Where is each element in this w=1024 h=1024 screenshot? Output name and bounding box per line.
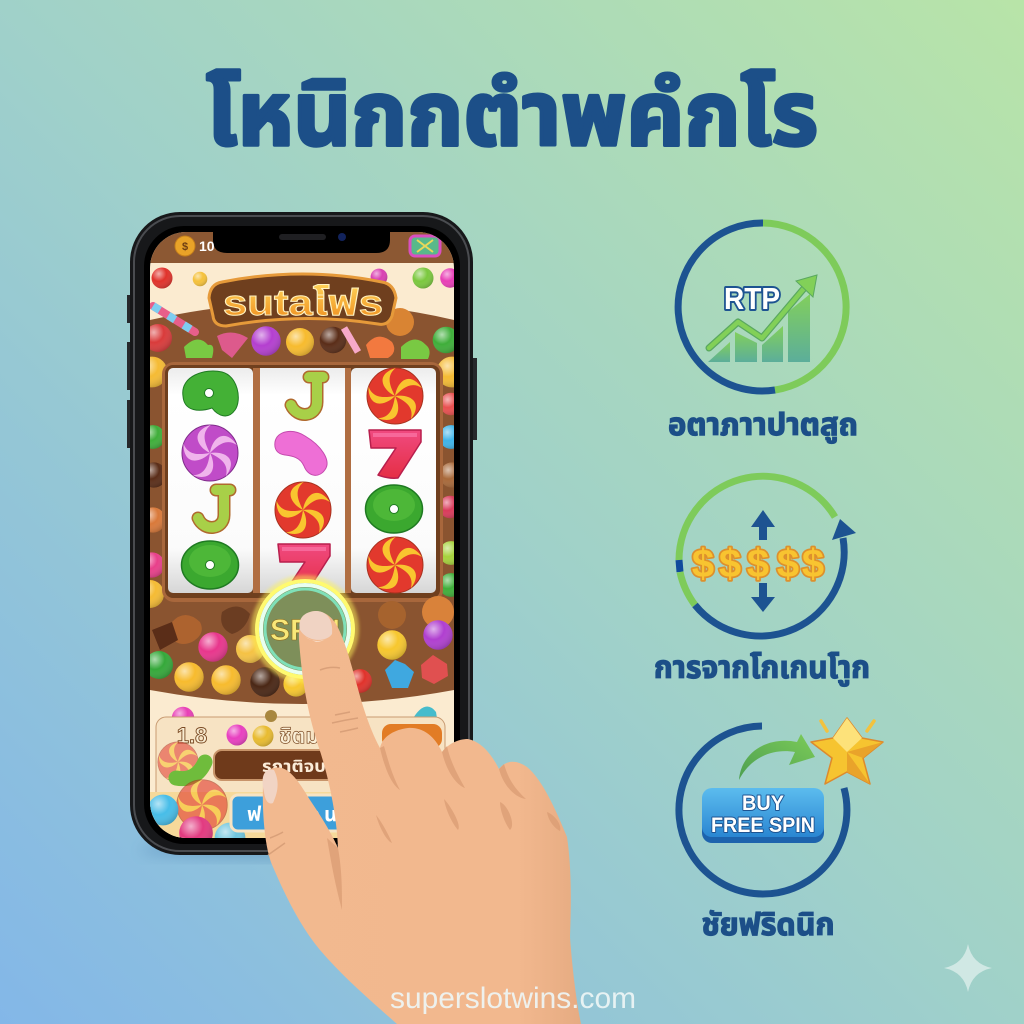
ring: free spin xyxy=(679,726,847,894)
index nail xyxy=(299,611,332,640)
notch and top bar items: $ xyxy=(182,241,188,253)
spin button xyxy=(251,575,359,683)
brown button xyxy=(213,749,328,781)
thumb nail xyxy=(263,770,278,803)
bottom game panel xyxy=(150,706,446,838)
star xyxy=(811,718,883,784)
stat: high RTP xyxy=(668,223,858,443)
rising bars xyxy=(708,294,810,362)
dollar signs: $ xyxy=(802,542,824,586)
gummies and cane xyxy=(153,306,430,359)
blue button xyxy=(231,795,351,831)
game screen xyxy=(150,232,454,838)
pointing hand xyxy=(263,611,581,1024)
top status bar xyxy=(150,232,454,263)
ring arrowhead xyxy=(832,519,856,540)
stat: volatility xyxy=(654,476,870,686)
chocolate board xyxy=(150,302,454,704)
bottom game panel: รถาติจบ xyxy=(262,757,326,776)
top candies xyxy=(144,268,460,356)
label: free spin: ชัยฟริดนิก xyxy=(702,907,834,942)
dollar signs: $ xyxy=(719,542,741,586)
reel 1 symbols xyxy=(178,371,238,589)
phone: candy slot game xyxy=(127,212,477,859)
cream backdrop xyxy=(150,232,454,838)
reel 2 symbols xyxy=(271,377,331,592)
ring: RTP xyxy=(678,223,846,391)
buy free spin button: BUY xyxy=(742,792,784,815)
ring: volatility xyxy=(679,476,844,636)
logo sign: sutaโฟs xyxy=(223,282,383,323)
side candies xyxy=(136,357,467,608)
bottom game panel: 1.8 xyxy=(177,723,207,748)
bottom game panel: ชิตม xyxy=(279,725,319,748)
trend arrow xyxy=(709,275,817,348)
phone shadow xyxy=(140,841,460,859)
lower board candies xyxy=(145,596,454,697)
notch and top bar items xyxy=(175,232,440,256)
stat: buy free spin xyxy=(679,718,883,942)
sparkle xyxy=(944,944,992,992)
finger shadows xyxy=(327,746,560,910)
dollar signs: $ xyxy=(692,542,714,586)
phone side buttons xyxy=(127,295,477,448)
spin button: SPIN xyxy=(270,614,340,647)
notch and top bar items: 10 xyxy=(199,238,215,254)
green arrow xyxy=(739,734,815,780)
buy free spin button: FREE SPIN xyxy=(711,814,815,837)
dollar signs xyxy=(692,542,824,586)
dollar signs: $ xyxy=(747,542,769,586)
buy free spin button xyxy=(702,788,824,843)
logo sign xyxy=(209,274,396,326)
dollar signs: $ xyxy=(777,542,799,586)
bottom game panel: ฟรีเดือน xyxy=(247,804,337,826)
knuckle creases xyxy=(268,667,358,855)
up arrow xyxy=(751,510,775,540)
slot reels xyxy=(162,362,443,602)
phone body xyxy=(130,212,473,855)
website footer: superslotwins.com xyxy=(390,982,636,1015)
reel 3 symbols xyxy=(363,365,423,595)
RTP text: RTP xyxy=(724,281,780,316)
label: volatility: การจากโกเกนโาูก xyxy=(654,650,870,686)
label: high RTP: อตาภาาปาตสูถ xyxy=(668,407,858,443)
down arrow xyxy=(751,583,775,612)
bottom candies xyxy=(150,792,338,838)
title: โหนิกกตำพคํกโร xyxy=(206,65,818,165)
